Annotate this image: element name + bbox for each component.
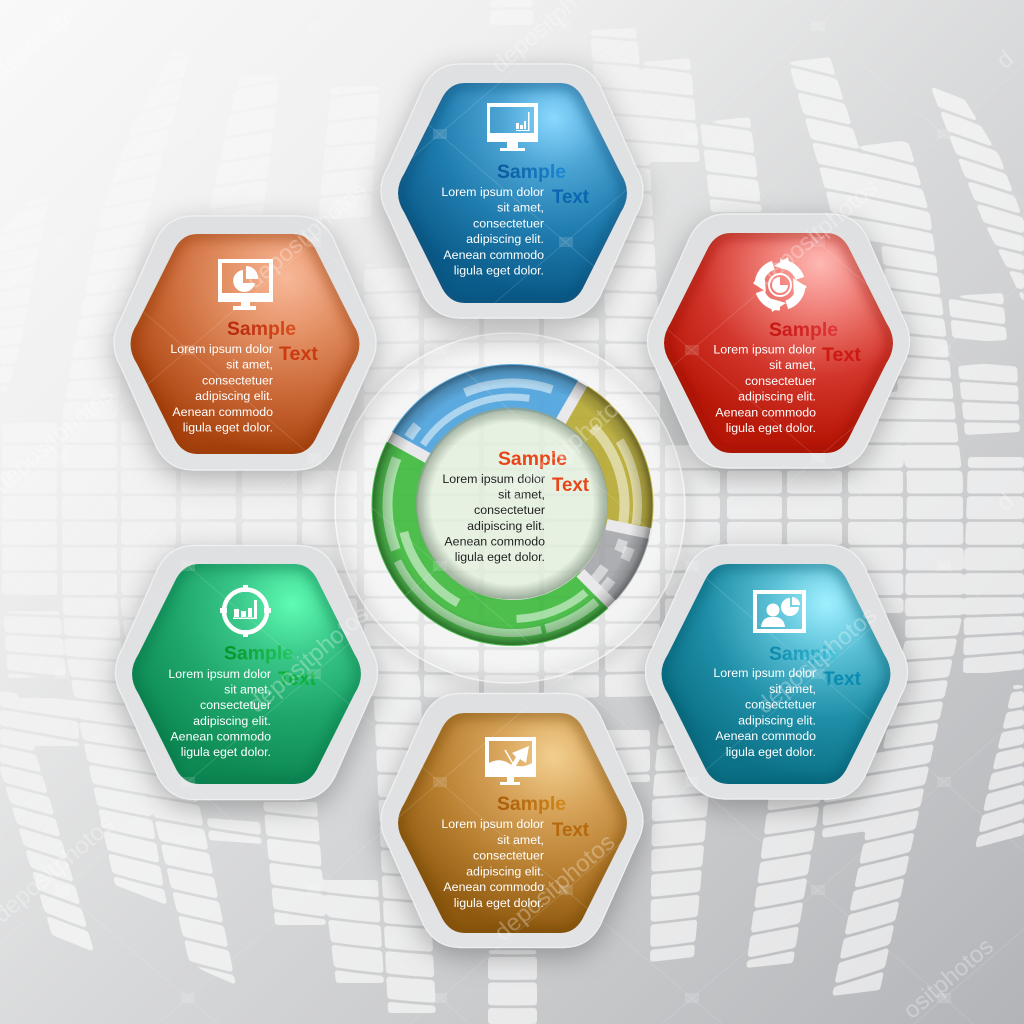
body text: Aenean commodo bbox=[443, 248, 544, 262]
hexagon frame bbox=[114, 216, 376, 470]
icon: target with bar chart bbox=[220, 585, 271, 637]
watermarks: depositphotos bbox=[752, 174, 883, 292]
body text: ligula eget dolor. bbox=[183, 420, 273, 434]
hexagon fill bbox=[130, 234, 360, 454]
icon: monitor with rising arrow bbox=[485, 737, 536, 785]
body text: adipiscing elit. bbox=[466, 232, 544, 246]
center body text: Lorem ipsum dolor bbox=[442, 472, 545, 486]
body text: consectetuer bbox=[745, 374, 816, 388]
heading: Text bbox=[552, 187, 590, 208]
panel: red hexagon bbox=[648, 214, 910, 468]
heading: Text bbox=[822, 345, 862, 366]
panel: orange hexagon bbox=[114, 216, 376, 470]
body text: sit amet, bbox=[226, 358, 273, 372]
body text: consectetuer bbox=[200, 698, 271, 712]
body text: Aenean commodo bbox=[715, 405, 816, 419]
hexagon frame bbox=[116, 546, 378, 800]
heading: Text bbox=[279, 344, 319, 365]
watermarks: depositphotos bbox=[241, 177, 372, 295]
heading bbox=[497, 794, 590, 841]
body text: adipiscing elit. bbox=[466, 864, 544, 878]
icon: presenter screen bbox=[753, 590, 806, 633]
hexagon frame bbox=[381, 694, 643, 948]
body text: Aenean commodo bbox=[443, 880, 544, 894]
center body text: ligula eget dolor. bbox=[455, 550, 545, 564]
watermarks: d bbox=[991, 487, 1019, 517]
heading: Sample bbox=[497, 794, 566, 815]
watermarks: depositphotos bbox=[751, 602, 882, 720]
watermarks: ositphotos bbox=[898, 933, 999, 1024]
watermarks: depositphotos bbox=[243, 601, 374, 719]
body text: consectetuer bbox=[745, 698, 816, 712]
heading: Sample bbox=[769, 644, 838, 665]
body text: sit amet, bbox=[769, 682, 816, 696]
body text: adipiscing elit. bbox=[193, 714, 271, 728]
body text: sit amet, bbox=[769, 358, 816, 372]
panel: teal hexagon bbox=[646, 545, 908, 799]
body text: sit amet, bbox=[224, 683, 271, 697]
hexagon fill bbox=[398, 713, 627, 933]
center body text: adipiscing elit. bbox=[467, 519, 545, 533]
panel: green hexagon bbox=[116, 546, 378, 800]
panel: gold hexagon bbox=[381, 694, 643, 948]
heading: Text bbox=[823, 669, 862, 690]
heading: Sample bbox=[769, 320, 838, 341]
ring dividers bbox=[386, 379, 653, 609]
disc shadow bbox=[336, 336, 684, 684]
center body text: consectetuer bbox=[474, 503, 545, 517]
body text: Aenean commodo bbox=[715, 729, 816, 743]
heading bbox=[227, 319, 319, 365]
hexagon frame bbox=[648, 214, 910, 468]
heading: Sample bbox=[224, 644, 293, 664]
heading: Text bbox=[278, 669, 317, 690]
center heading: Sample bbox=[498, 449, 567, 470]
body text: Lorem ipsum dolor bbox=[713, 342, 816, 356]
center heading bbox=[498, 449, 590, 496]
body text: consectetuer bbox=[473, 849, 544, 863]
watermarks: depositphotos bbox=[489, 829, 620, 947]
body text: ligula eget dolor. bbox=[726, 745, 816, 759]
center circle panel bbox=[332, 324, 693, 686]
body text: Lorem ipsum dolor bbox=[168, 667, 271, 681]
panel: blue hexagon bbox=[381, 64, 643, 318]
icon: monitor with pie chart bbox=[218, 259, 273, 310]
body text: adipiscing elit. bbox=[738, 390, 816, 404]
heading bbox=[769, 320, 862, 366]
hexagon fill bbox=[398, 83, 627, 303]
translucent outer disc bbox=[335, 333, 685, 683]
body text: adipiscing elit. bbox=[738, 713, 816, 727]
ring detail arcs bbox=[332, 324, 693, 686]
heading: Sample bbox=[227, 319, 296, 340]
icon: monitor with bar chart bbox=[487, 103, 538, 151]
heading bbox=[769, 644, 862, 690]
body text: sit amet, bbox=[497, 201, 544, 215]
segmented ring bbox=[346, 338, 679, 672]
body text: Lorem ipsum dolor bbox=[441, 185, 544, 199]
body text: Lorem ipsum dolor bbox=[713, 666, 816, 680]
body text: Aenean commodo bbox=[170, 729, 271, 743]
hexagon fill bbox=[132, 564, 361, 784]
icon: cycle arrows with pie bbox=[753, 257, 807, 312]
hexagon frame bbox=[381, 64, 643, 318]
heading: Text bbox=[552, 820, 590, 841]
body text: Aenean commodo bbox=[172, 405, 273, 419]
watermarks: depositphotos bbox=[502, 388, 633, 506]
hexagon frame bbox=[646, 545, 908, 799]
heading bbox=[497, 162, 590, 208]
inner disc shading bbox=[416, 408, 608, 600]
center body text: Aenean commodo bbox=[444, 534, 545, 548]
body text: sit amet, bbox=[497, 833, 544, 847]
heading bbox=[224, 644, 317, 690]
body text: ligula eget dolor. bbox=[454, 896, 544, 910]
body text: ligula eget dolor. bbox=[726, 421, 816, 435]
center body text: sit amet, bbox=[498, 488, 545, 502]
body text: ligula eget dolor. bbox=[454, 264, 544, 278]
center heading: Text bbox=[552, 475, 590, 496]
body text: consectetuer bbox=[473, 216, 544, 230]
heading: Sample bbox=[497, 162, 566, 183]
body text: consectetuer bbox=[202, 373, 273, 387]
watermarks: d bbox=[991, 45, 1019, 75]
ring shading bbox=[372, 365, 652, 645]
body text: ligula eget dolor. bbox=[181, 745, 271, 759]
body text: adipiscing elit. bbox=[195, 389, 273, 403]
inner disc bbox=[416, 408, 608, 600]
hexagon fill bbox=[662, 564, 890, 784]
body text: Lorem ipsum dolor bbox=[170, 342, 273, 356]
hexagon fill bbox=[664, 233, 893, 453]
body text: Lorem ipsum dolor bbox=[441, 817, 544, 831]
